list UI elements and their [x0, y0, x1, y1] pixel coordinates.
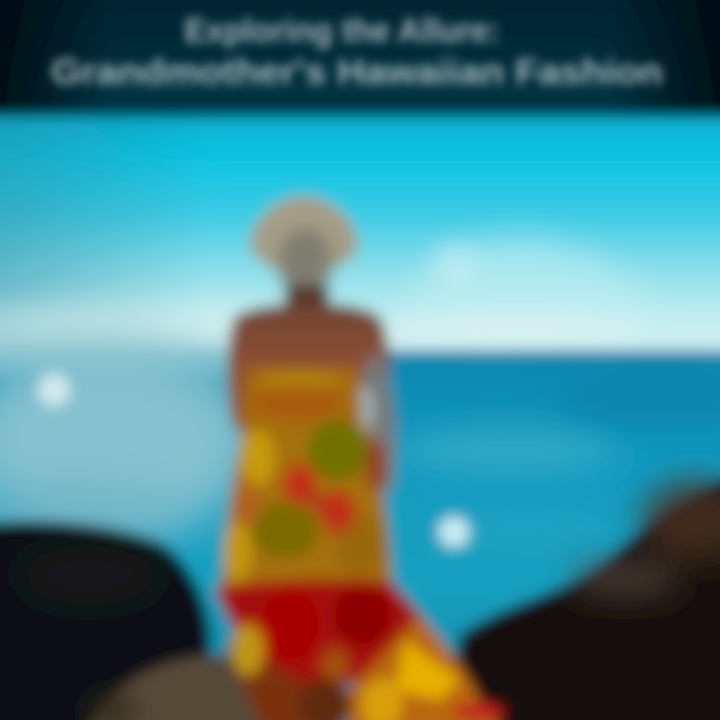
arm	[354, 350, 396, 490]
title: Grandmother's Hawaiian Fashion	[51, 51, 663, 92]
hat	[250, 196, 358, 296]
sky background	[0, 100, 720, 352]
title band	[0, 0, 720, 117]
title: Exploring the Allure:	[184, 12, 500, 50]
sun glints on water	[38, 374, 469, 547]
sea	[0, 340, 720, 720]
dress skirt	[222, 420, 392, 590]
red hem band	[214, 580, 440, 695]
figure in sundress	[214, 196, 505, 720]
lower skirt	[225, 615, 505, 720]
neck and shoulders	[228, 285, 389, 430]
rocks	[0, 470, 720, 720]
dress bodice	[242, 368, 362, 428]
title	[51, 12, 663, 92]
